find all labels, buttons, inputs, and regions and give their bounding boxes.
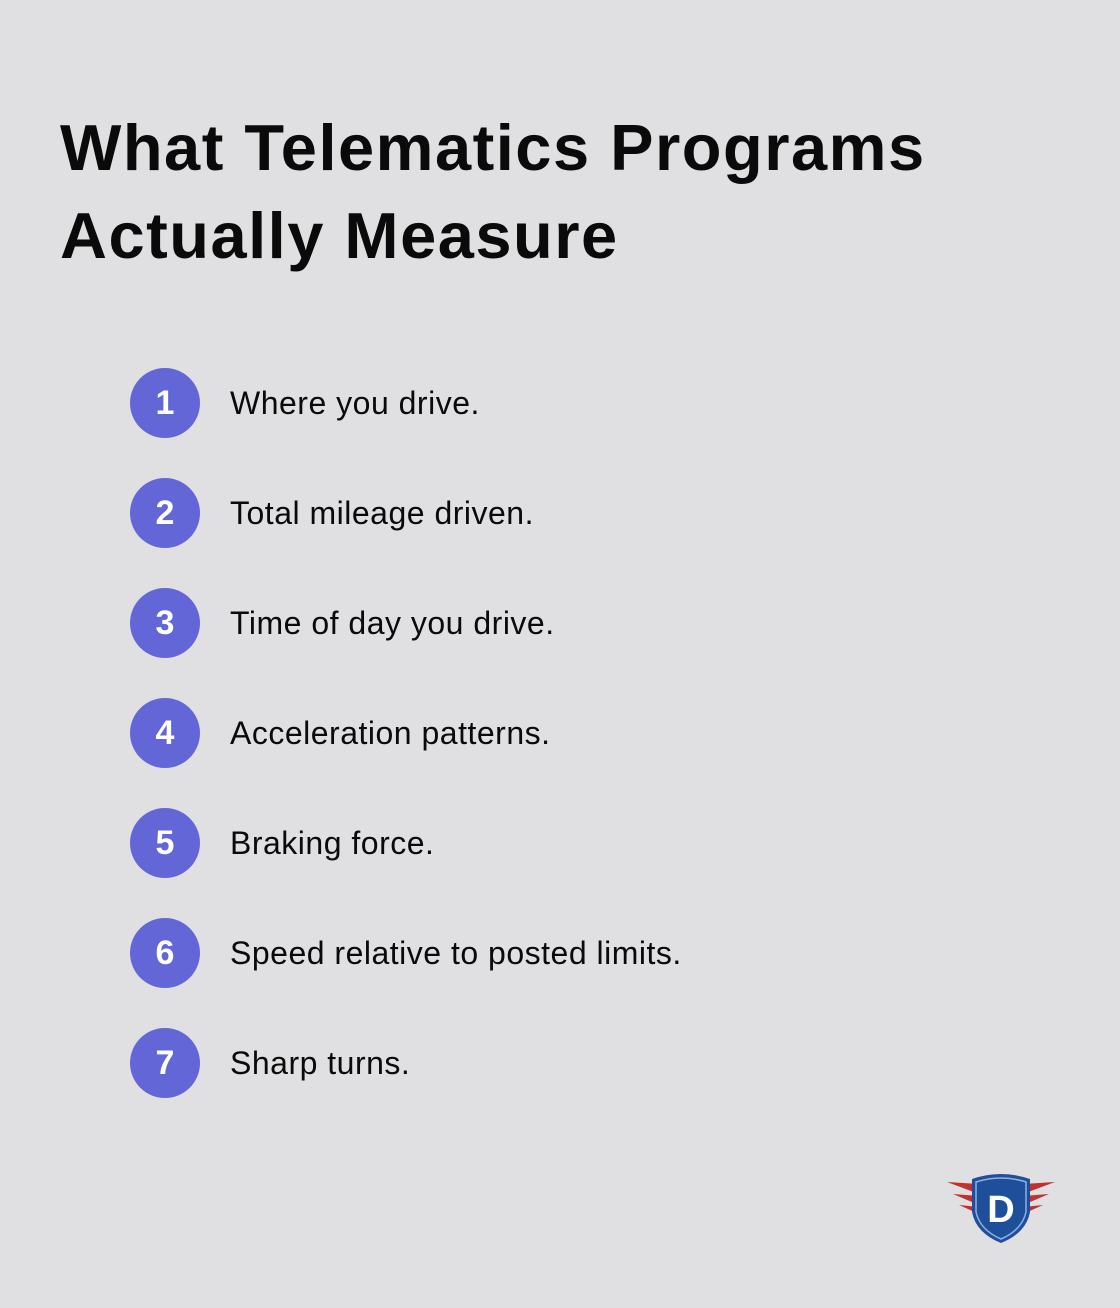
item 2: 2	[156, 494, 174, 532]
icon: logo shield	[947, 1174, 1055, 1243]
item 2	[130, 478, 534, 548]
item 4: 4	[156, 714, 174, 752]
item 6: 6	[156, 934, 174, 972]
icon: logo shield: D	[987, 1189, 1015, 1231]
title	[60, 111, 926, 272]
item 3	[130, 588, 555, 658]
item 5: 5	[156, 824, 174, 862]
item 4	[130, 698, 550, 768]
item 7: 7	[156, 1044, 174, 1082]
item 1	[130, 368, 480, 438]
item 3: 3	[156, 604, 174, 642]
item 3: Time of day you drive.	[230, 605, 555, 641]
item 7	[130, 1028, 410, 1098]
title: What Telematics Programs	[60, 111, 926, 184]
item 6	[130, 918, 682, 988]
title: Actually Measure	[60, 199, 619, 272]
item 5: Braking force.	[230, 825, 434, 861]
item 7: Sharp turns.	[230, 1045, 410, 1081]
item 1: Where you drive.	[230, 385, 480, 421]
item 2: Total mileage driven.	[230, 495, 534, 531]
item 5	[130, 808, 434, 878]
item 6: Speed relative to posted limits.	[230, 935, 682, 971]
item 1: 1	[156, 384, 174, 422]
item 4: Acceleration patterns.	[230, 715, 550, 751]
